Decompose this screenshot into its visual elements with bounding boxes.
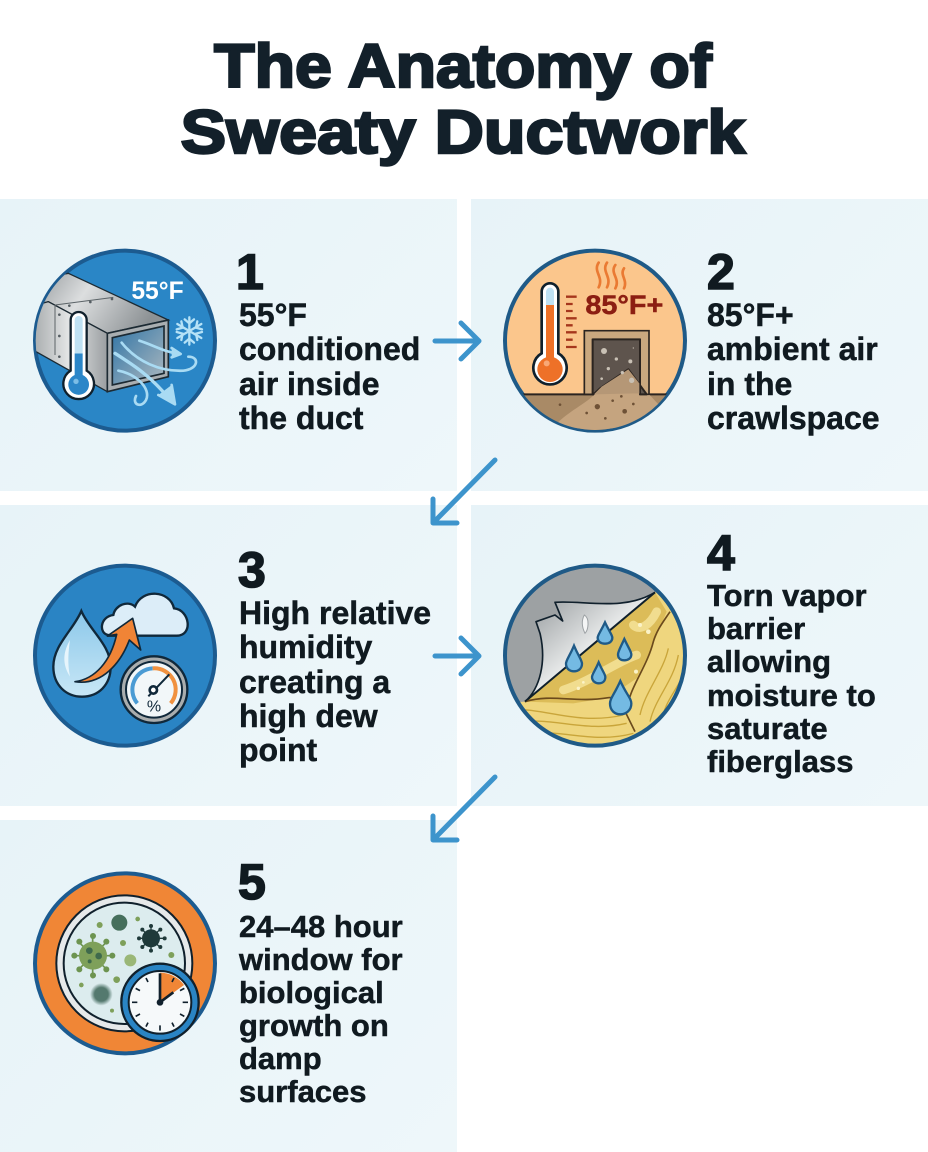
doorway <box>584 331 649 394</box>
title <box>180 32 748 167</box>
tear <box>525 592 655 702</box>
step text 2: ambient air <box>707 331 878 367</box>
step text 4: fiberglass <box>707 744 853 779</box>
step text 2: in the <box>707 366 792 402</box>
airflow <box>115 341 196 405</box>
gauge <box>121 656 187 723</box>
panel: step 5 <box>0 820 457 1152</box>
step text 2: crawlspace <box>707 400 880 436</box>
step text 3: creating a <box>239 664 390 700</box>
step text 3: high dew <box>239 698 378 734</box>
step text 1: the duct <box>239 400 363 436</box>
step text 1: air inside <box>239 366 380 402</box>
step text 4: Torn vapor <box>707 578 867 613</box>
step text 4: barrier <box>707 611 805 646</box>
step number 1: 1 <box>236 244 264 300</box>
step text 2: 85°F+ <box>707 297 794 333</box>
panel: step 1 <box>0 199 457 491</box>
foil background <box>507 568 656 702</box>
icon: cold duct <box>33 248 217 433</box>
thermometer <box>63 312 94 399</box>
cloud <box>102 594 188 636</box>
icon: petri dish and clock <box>33 871 217 1056</box>
fiber lines <box>510 710 633 737</box>
step text 2 <box>707 297 880 436</box>
step text 1 <box>239 297 420 436</box>
step text 5: window for <box>239 942 403 977</box>
cracks <box>525 592 655 702</box>
step text 3 <box>239 595 431 768</box>
step text 3: humidity <box>239 629 372 665</box>
torn flap <box>533 596 648 694</box>
water drop <box>53 611 111 697</box>
step text 5: surfaces <box>239 1074 367 1109</box>
thermometer <box>533 283 567 384</box>
icon: cold duct: 55°F <box>131 278 184 305</box>
step text 5: biological <box>239 975 384 1010</box>
step text 1: conditioned <box>239 331 420 367</box>
snowflake <box>177 317 202 345</box>
step number 3: 3 <box>238 542 266 598</box>
step text 4: moisture to <box>707 678 876 713</box>
step number 5: 5 <box>238 854 266 910</box>
arrow: step 4 to 5 <box>430 774 498 842</box>
step text 3: point <box>239 732 317 768</box>
step text 1: 55°F <box>239 297 307 333</box>
title: The Anatomy of <box>214 32 712 100</box>
heat waves <box>597 263 625 288</box>
rising arrow <box>75 618 141 682</box>
microbes <box>72 935 114 978</box>
clock <box>121 964 199 1041</box>
fiberglass middle <box>525 592 667 703</box>
panel: step 4 <box>471 505 928 806</box>
step text 4: allowing <box>707 644 831 679</box>
step text 5: growth on <box>239 1008 389 1043</box>
icon: humidity: % <box>147 699 161 716</box>
water droplets <box>566 622 631 714</box>
arrow: step 3 to 4 <box>432 636 482 676</box>
step text 5: damp <box>239 1041 322 1076</box>
step number 2: 2 <box>707 244 735 300</box>
scale ticks <box>566 297 577 347</box>
arrow: step 2 to 3 <box>430 458 498 526</box>
icon: hot crawlspace <box>503 248 687 433</box>
step text 5: 24–48 hour <box>239 909 403 944</box>
step text 4 <box>707 578 876 779</box>
step text 5 <box>238 909 403 1109</box>
panel: step 3 <box>0 505 457 806</box>
step text 4: saturate <box>707 711 828 746</box>
arrow: step 1 to 2 <box>432 320 482 362</box>
icon: humidity <box>33 564 217 748</box>
step number 4: 4 <box>707 525 735 581</box>
icon: torn vapor barrier <box>503 564 687 748</box>
title: Sweaty Ductwork <box>181 98 745 166</box>
step text 3: High relative <box>239 595 431 631</box>
icon: hot crawlspace: 85°F+ <box>585 290 663 320</box>
panel: step 2 <box>471 199 928 491</box>
